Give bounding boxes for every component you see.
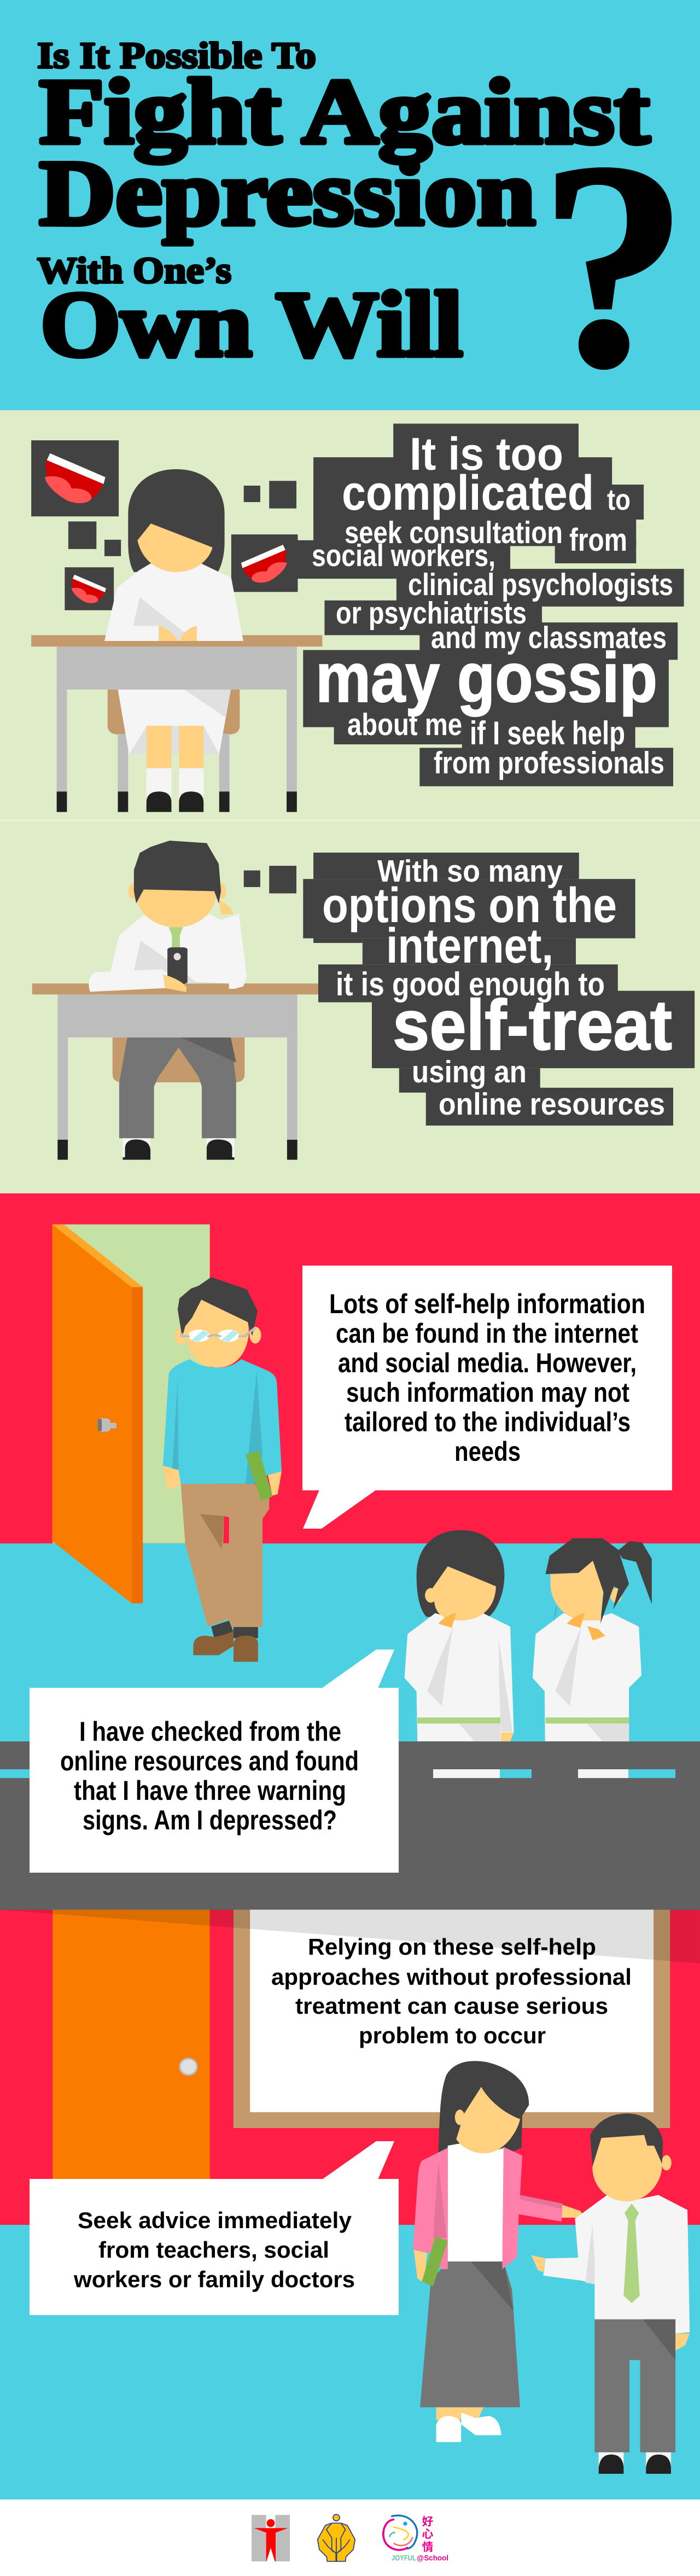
title line: Own Will: Own Will — [40, 273, 463, 376]
speech block: self-treat using online resources: it is good enough to — [336, 966, 605, 1003]
panel: advice scene with teacher and student — [0, 1910, 700, 2499]
text: relying on self-help warning: Relying on these self-help — [308, 1934, 596, 1960]
logo: Joyful at School: 情 — [422, 2541, 433, 2554]
logo: Joyful at School: @School — [417, 2554, 448, 2562]
speech bubble: warning signs question: I have checked from the — [79, 1716, 341, 1747]
speech block: too complicated and may gossip: It is too — [410, 428, 563, 480]
speech block: self-treat using online resources: internet, — [386, 919, 553, 974]
speech block: self-treat using online resources: With so many — [377, 854, 563, 889]
footer logos — [0, 2499, 700, 2576]
speech bubble: self-help information: Lots of self-help information — [329, 1289, 645, 1319]
panel: green background, self-treat online — [0, 820, 700, 1193]
title panel — [0, 0, 700, 428]
speech bubble: seek advice immediately: workers or family doctors — [73, 2266, 355, 2292]
title line: Is It Possible To: Is It Possible To — [37, 34, 316, 76]
logo: Joyful at School: 心 — [422, 2528, 434, 2540]
speech bubble: self-help information: can be found in the internet — [336, 1318, 638, 1349]
speech bubble: seek advice immediately: from teachers, social — [98, 2237, 329, 2263]
logo: yellow hands — [318, 2514, 355, 2561]
illustration: female teacher in pink jacket — [413, 2061, 585, 2442]
illustration: male student in shirt and tie — [531, 2113, 690, 2474]
illustration: open door — [52, 1225, 210, 1604]
speech bubble: self-help information: and social media. However, — [338, 1348, 637, 1378]
speech block: self-treat using online resources: online resources — [439, 1087, 665, 1122]
speech bubble: warning signs question: that I have three warning — [74, 1775, 346, 1806]
speech block: too complicated and may gossip — [298, 424, 684, 786]
speech block: too complicated and may gossip: about me — [347, 707, 462, 742]
speech bubble: warning signs question: online resources and found — [60, 1746, 359, 1776]
illustration: student girl with ponytail — [533, 1538, 652, 1741]
illustration: girl at desk with gossiping mouths — [31, 440, 322, 812]
logo: Joyful at School: JOYFUL — [392, 2554, 416, 2562]
road strip with dashes — [0, 1741, 700, 1910]
illustration: door and notice board — [0, 1910, 700, 2184]
speech block: self-treat using online resources: using an — [412, 1054, 527, 1089]
speech block: too complicated and may gossip: if I seek help — [470, 715, 625, 751]
title line: Depression: Depression — [39, 142, 535, 244]
logo: red figure — [252, 2515, 290, 2561]
speech bubble: seek advice immediately: Seek advice immediately — [78, 2207, 352, 2233]
speech block: too complicated and may gossip: or psychiatrists — [336, 596, 527, 631]
speech bubble: seek advice immediately — [30, 2141, 399, 2315]
speech block: too complicated and may gossip: seek consultation — [345, 515, 563, 550]
title line: Fight Against: Fight Against — [39, 60, 650, 163]
speech block: too complicated and may gossip: social workers, — [312, 538, 495, 573]
speech block: self-treat using online resources: self-treat — [393, 985, 672, 1065]
speech block: too complicated and may gossip: may gossip — [316, 639, 657, 717]
illustration: boy at desk with phone — [32, 841, 322, 1159]
speech block: too complicated and may gossip: from — [569, 522, 627, 558]
logo: Joyful at School — [383, 2515, 448, 2562]
speech block: too complicated and may gossip: to — [607, 483, 631, 516]
text: relying on self-help warning: treatment can cause serious — [295, 1993, 608, 2019]
illustration: student girl with long hair — [405, 1530, 514, 1741]
speech bubble: self-help information: needs — [454, 1436, 521, 1467]
speech block: self-treat using online resources — [303, 853, 695, 1126]
speech block: self-treat using online resources: options on the — [322, 878, 617, 933]
speech block: too complicated and may gossip: complicated — [342, 466, 594, 521]
speech bubble: warning signs question: signs. Am I depressed? — [83, 1805, 337, 1835]
text: relying on self-help warning: problem to occur — [359, 2023, 546, 2048]
logo: Joyful at School: 好 — [422, 2515, 434, 2528]
title line: With One's: With One’s — [37, 249, 231, 291]
speech bubble: self-help information: such information may not — [346, 1377, 629, 1408]
text: relying on self-help warning — [271, 1934, 632, 2048]
illustration: male teacher with glasses and book — [163, 1277, 282, 1638]
large question mark: ? — [539, 101, 688, 428]
speech bubble: warning signs question — [30, 1650, 399, 1873]
panel: teacher and students in corridor — [0, 1193, 700, 1910]
text: relying on self-help warning: approaches without professional — [271, 1964, 632, 1990]
speech bubble: self-help information: tailored to the individual’s — [345, 1407, 631, 1437]
panel: green background, too complicated and may gossip — [0, 410, 700, 820]
speech bubble: self-help information — [302, 1266, 672, 1529]
